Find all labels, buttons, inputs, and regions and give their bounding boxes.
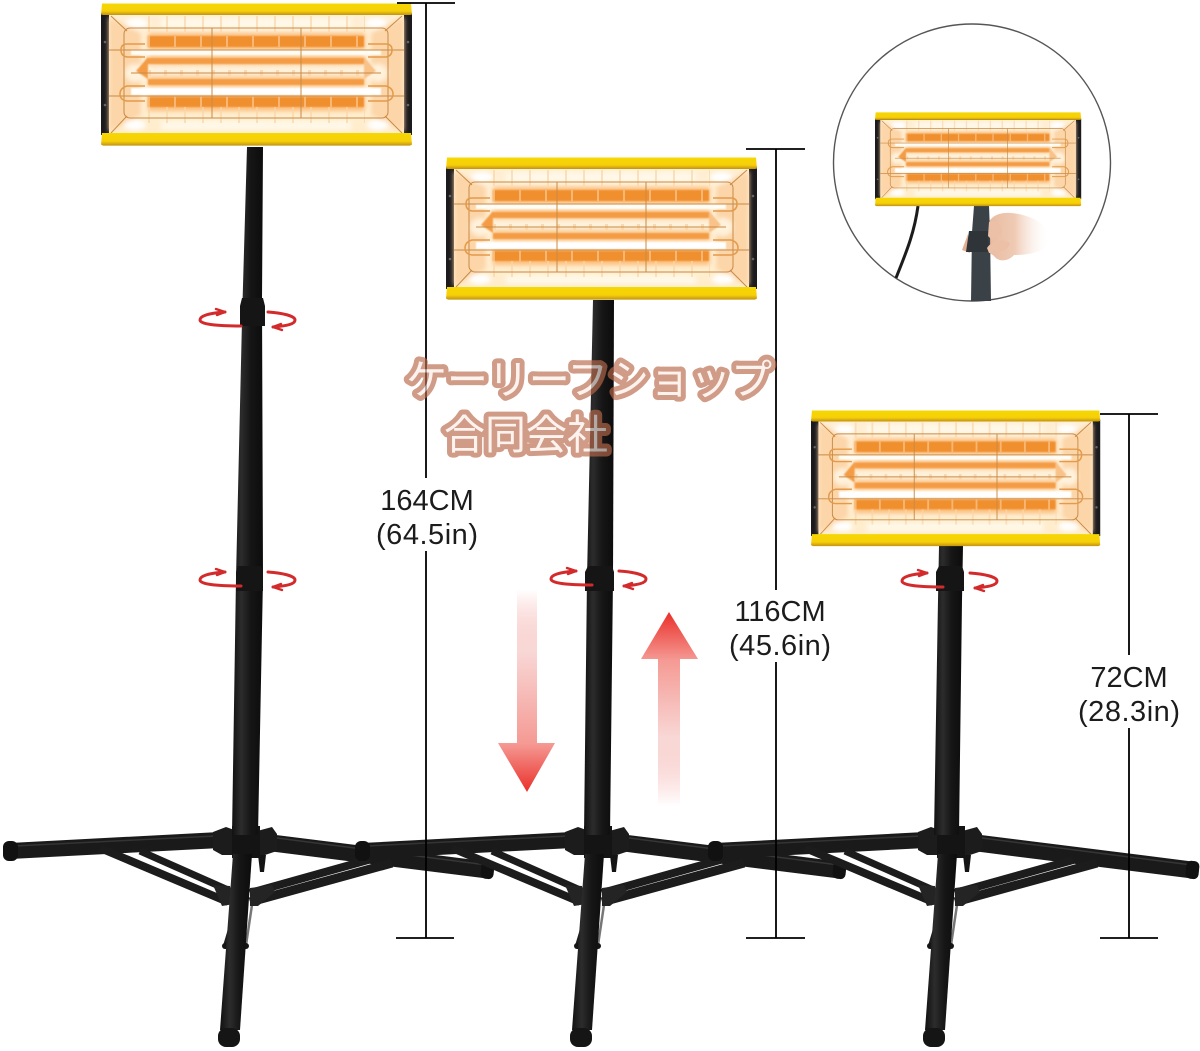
height dimension: 116cm: 116CM [734,596,826,628]
height dimension: 116cm: (45.6in) [729,630,831,662]
height dimension: 116cm [729,149,831,938]
heater lamp: middle [446,158,757,300]
tripod stand: tall left [3,147,495,1047]
arrow: raise height [641,612,698,806]
height dimension: 72cm: (28.3in) [1078,696,1180,728]
tripod stand: short right [708,546,1200,1047]
inset pole [971,206,991,301]
watermark: company name: 合同会社 [444,412,608,458]
height dimension: 164cm: (64.5in) [376,519,478,551]
height dimension: 164cm [376,3,478,938]
watermark: company name [406,357,772,458]
inset heater lamp [875,112,1081,206]
rotation arrow: right collar [902,570,997,591]
telescopic pole right [934,546,963,835]
inset fingers [987,221,1010,253]
rotation arrow: middle collar [551,568,646,589]
arrow: lower height [498,590,555,792]
telescopic pole left [232,147,263,835]
tripod base left [3,826,495,1047]
pole collar right [936,566,964,591]
watermark: company name: ケーリーフショップ [406,357,772,403]
inset hand [962,213,1050,260]
rotation arrow: left upper collar [200,309,295,330]
tripod base middle [355,826,847,1047]
pole collar middle [585,566,614,591]
height dimension: 164cm: 164CM [380,485,474,517]
pole collars left [236,298,265,591]
tripod base right [708,826,1200,1047]
telescopic pole middle [584,300,614,835]
inset circle: hand adjusting the pole [834,24,1110,301]
heater lamp: right [811,410,1100,546]
height dimension: 72cm [1078,414,1180,938]
height dimension: 72cm: 72CM [1090,662,1168,694]
inset pole collar [966,231,989,252]
tripod stand: middle [355,300,847,1047]
rotation arrow: left lower collar [200,569,295,590]
inset circle outline [834,24,1110,301]
inset power cable [896,206,918,278]
heater lamp: left [101,4,412,146]
